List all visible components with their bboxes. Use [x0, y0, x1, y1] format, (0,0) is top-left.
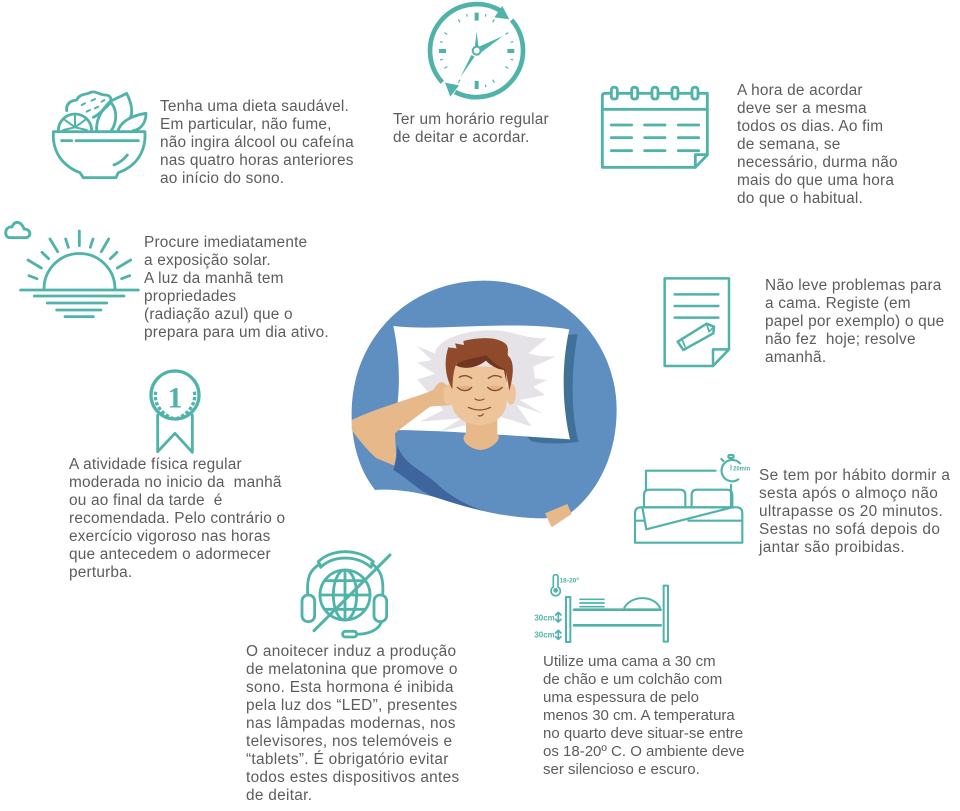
text: problems: Não leve problemas para: [765, 277, 942, 294]
text: bed and room: Utilize uma cama a 30 cm: [543, 653, 716, 670]
text: wake time: [737, 82, 898, 207]
text: nap: jantar são proibidas.: [759, 539, 905, 556]
text: regular schedule: de deitar e acordar.: [393, 129, 530, 146]
text: healthy diet: [160, 98, 354, 187]
illustration: sleeping man: [352, 281, 617, 527]
text: bed and room: [543, 653, 744, 778]
icon: calendar: [602, 87, 707, 167]
text: melatonin and devices: sono. Esta hormona é inibida: [246, 679, 454, 696]
text: sun exposure: Procure imediatamente: [144, 234, 307, 251]
shirt shadow: [393, 445, 483, 511]
text: wake time: necessário, durma não: [737, 154, 898, 171]
text: bed and room: uma espessura de pelo: [543, 689, 699, 706]
text: physical activity: que antecedem o adormecer: [69, 546, 271, 563]
icon: bed with measurements: 30cm: [534, 631, 555, 640]
text: wake time: todos os dias. Ao fim: [737, 118, 883, 135]
text: problems: papel por exemplo) o que: [765, 313, 944, 330]
text: problems: amanhã.: [765, 349, 826, 366]
text: healthy diet: Tenha uma dieta saudável.: [160, 98, 349, 115]
text: melatonin and devices: O anoitecer induz a produção: [246, 643, 456, 660]
arm: [352, 382, 452, 467]
text: healthy diet: ao início do sono.: [160, 170, 284, 187]
text: bed and room: os 18-20º C. O ambiente deve: [543, 743, 744, 760]
text: healthy diet: Em particular, não fume,: [160, 116, 332, 133]
text: melatonin and devices: “tablets”. É obrigatório evitar: [246, 751, 449, 768]
eyes and brows: [457, 386, 502, 391]
icon: bed with 20 minute timer: [635, 455, 751, 543]
text: nap: sesta após o almoço não: [759, 485, 938, 502]
shirt: [393, 431, 591, 518]
text: melatonin and devices: de melatonina que promove o: [246, 661, 458, 678]
text: melatonin and devices: de deitar.: [246, 787, 312, 804]
neck: [464, 417, 499, 450]
text: nap: [758, 467, 950, 556]
text: melatonin and devices: [246, 643, 459, 804]
text: physical activity: recomendada. Pelo contrário o: [69, 510, 285, 527]
text: physical activity: exercício vigoroso nas horas: [69, 528, 270, 545]
icon: salad bowl: [53, 92, 146, 178]
text: wake time: mais do que uma hora: [737, 172, 894, 189]
text: melatonin and devices: televisores, nos telemóveis e: [246, 733, 452, 750]
text: wake time: de semana, se: [737, 136, 841, 153]
text: sun exposure: (radiação azul) que o: [144, 306, 293, 323]
text: melatonin and devices: todos estes dispositivos antes: [246, 769, 459, 786]
text: sun exposure: a exposição solar.: [144, 252, 271, 269]
text: regular schedule: Ter um horário regular: [393, 111, 549, 128]
text: physical activity: A atividade física regular: [69, 456, 242, 473]
icon: medal: 1: [167, 382, 182, 415]
text: nap: Sestas no sofá depois do: [759, 521, 940, 538]
text: healthy diet: nas quatro horas anteriores: [160, 152, 354, 169]
text: bed and room: no quarto deve situar-se entre: [543, 725, 743, 742]
icon: bed with measurements: 18-20º: [559, 578, 579, 585]
pillow: [393, 326, 570, 439]
text: physical activity: moderada no inicio da manhã: [69, 474, 282, 491]
text: melatonin and devices: nas lâmpadas modernas, nos: [246, 715, 456, 732]
text: melatonin and devices: pela luz dos “LED”, presentes: [246, 697, 457, 714]
text: problems: [765, 277, 944, 366]
icon: bed with 20 minute timer: 20min: [733, 467, 751, 473]
icon: medal: [151, 371, 199, 452]
text: sun exposure: A luz da manhã tem: [144, 270, 284, 287]
face: [452, 367, 507, 425]
text: healthy diet: não ingira álcool ou cafeína: [160, 134, 354, 151]
icon: clock with arrows: [430, 4, 523, 97]
text: sun exposure: propriedades: [144, 288, 236, 305]
text: problems: a cama. Registe (em: [765, 295, 911, 312]
icon: bed with measurements: 30cm: [534, 614, 555, 623]
pillow dent: [417, 330, 556, 432]
icon: cloud: [6, 222, 30, 238]
icon: headset and globe crossed out: [302, 552, 390, 637]
blue circle background: [352, 281, 617, 518]
icon: paper with pencil: [665, 278, 729, 366]
text: wake time: deve ser a mesma: [737, 100, 867, 117]
icon: bed with measurements: [534, 575, 668, 642]
text: problems: não fez hoje; resolve: [765, 331, 916, 348]
text: physical activity: [69, 456, 285, 581]
text: wake time: do que o habitual.: [737, 190, 863, 207]
text: physical activity: perturba.: [69, 564, 132, 581]
pillow shadow: [527, 334, 579, 446]
nose and mouth: [468, 399, 491, 416]
hair: [446, 338, 513, 391]
text: regular schedule: [393, 111, 549, 146]
text: wake time: A hora de acordar: [737, 82, 863, 99]
text: sun exposure: [144, 234, 329, 341]
text: nap: ultrapasse os 20 minutos.: [759, 503, 943, 520]
ears: [443, 384, 453, 406]
text: physical activity: ou ao final da tarde é: [69, 492, 222, 509]
text: bed and room: de chão e um colchão com: [543, 671, 722, 688]
text: sun exposure: prepara para um dia ativo.: [144, 324, 329, 341]
icon: rising sun: [21, 231, 138, 317]
text: bed and room: menos 30 cm. A temperatura: [543, 707, 735, 724]
text: nap: Se tem por hábito dormir a: [759, 467, 950, 484]
text: bed and room: ser silencioso e escuro.: [543, 761, 700, 778]
hand at bottom: [545, 504, 572, 527]
